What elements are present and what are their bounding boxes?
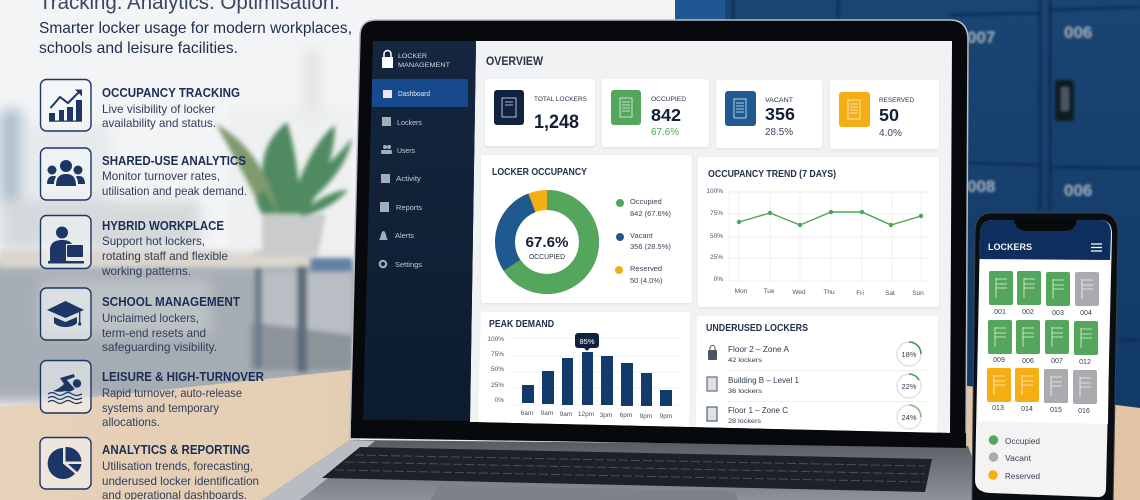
locker numbers: 004 xyxy=(1080,310,1092,317)
laptop lower bezel xyxy=(351,420,966,448)
icon: pie chart xyxy=(40,438,91,489)
locker tiles xyxy=(987,271,1099,404)
description xyxy=(102,386,242,429)
trend axis labels: 75% xyxy=(710,210,723,217)
donut chart: 67.6% xyxy=(526,234,568,251)
locker numbers: 007 xyxy=(1051,358,1063,365)
donut chart: OCCUPIED xyxy=(529,254,565,261)
menu items: Reports xyxy=(396,203,422,212)
row: building B level 1 xyxy=(707,374,921,398)
phone header: LOCKERS xyxy=(988,242,1032,252)
trend axis labels xyxy=(706,188,924,297)
trend axis labels: Sun xyxy=(912,290,924,297)
phone legend: Reserved xyxy=(1005,472,1040,481)
feature: analytics and reporting xyxy=(40,438,259,500)
brand name xyxy=(398,53,450,69)
stat card: reserved: 4.0% xyxy=(879,128,902,139)
menu items: Settings xyxy=(395,260,422,269)
row: floor 2 zone A: 18% xyxy=(901,350,917,359)
description: utilisation and peak demand. xyxy=(102,184,247,198)
heading: LEISURE & HIGH-TURNOVER xyxy=(102,370,264,384)
feature: school management xyxy=(40,288,240,354)
background: wooden desk xyxy=(0,369,1140,500)
phone screen xyxy=(975,220,1112,497)
icon: person at laptop xyxy=(40,216,91,268)
icon: rising chart xyxy=(40,80,91,131)
bar axis labels: 0% xyxy=(495,397,504,404)
bar axis labels: 12pm xyxy=(578,411,594,418)
subtitle: Smarter locker usage for modern workplaces, xyxy=(39,20,352,37)
callout: 85%: 85% xyxy=(579,337,595,346)
row: floor 1 zone C: 28 lockers xyxy=(728,418,762,425)
trend axis labels: Tue xyxy=(764,288,775,295)
bar axis labels: 9pm xyxy=(660,413,672,420)
locker numbers: 006 xyxy=(1022,358,1034,365)
icon: people xyxy=(40,148,91,200)
background: blue lockers: 008 xyxy=(967,177,995,196)
donut legend: 842 (67.6%) xyxy=(630,209,671,218)
brand name: MANAGEMENT xyxy=(398,62,450,69)
feature: occupancy tracking xyxy=(40,80,240,131)
icon: green document xyxy=(611,90,641,125)
phone body xyxy=(972,213,1118,500)
stat card: vacant: 28.5% xyxy=(765,127,793,138)
stat card: total lockers: 1,248 xyxy=(534,112,579,133)
heading: ANALYTICS & REPORTING xyxy=(102,443,250,457)
locker numbers: 009 xyxy=(993,357,1005,364)
bar axis labels: 6am xyxy=(521,410,533,417)
row: floor 1 zone C: 24% xyxy=(901,413,917,422)
feature: hybrid workplace xyxy=(40,216,228,278)
stat card: occupied: 842 xyxy=(651,105,681,125)
description: underused locker identification xyxy=(102,474,259,488)
donut legend: Vacant xyxy=(630,231,654,240)
stat card: total lockers xyxy=(485,79,595,146)
icon: swimmer xyxy=(40,360,91,413)
description: Unclaimed lockers, xyxy=(102,311,199,325)
donut chart xyxy=(505,200,589,284)
bar axis labels: 25% xyxy=(491,382,504,389)
feature: leisure and high-turnover xyxy=(40,360,264,429)
dashboard sidebar xyxy=(363,41,476,421)
overview heading: OVERVIEW xyxy=(486,56,543,68)
screen content area xyxy=(470,41,952,433)
heading: SHARED-USE ANALYTICS xyxy=(102,154,246,168)
plant xyxy=(216,122,352,216)
icon: graduation cap xyxy=(40,288,91,340)
laptop base and keyboard xyxy=(262,440,988,500)
trend line xyxy=(737,210,923,227)
phone header xyxy=(980,219,1111,260)
description: Monitor turnover rates, xyxy=(102,169,220,183)
locker numbers: 013 xyxy=(992,405,1004,412)
bar axis labels: 9am xyxy=(541,410,553,417)
stat card: occupied: 67.6% xyxy=(651,127,679,138)
panel: peak demand: PEAK DEMAND xyxy=(489,319,554,330)
icon: padlock xyxy=(382,50,393,68)
bar axis labels: 50% xyxy=(491,366,504,373)
stat card: vacant: 356 xyxy=(765,104,795,124)
description: working patterns. xyxy=(101,264,191,278)
locker numbers: 002 xyxy=(1022,309,1034,316)
trend axis labels: 25% xyxy=(710,254,723,261)
menu items xyxy=(379,117,422,269)
panel: locker occupancy: LOCKER OCCUPANCY xyxy=(492,167,587,178)
bar axis labels: 100% xyxy=(487,336,504,343)
trend axis labels: 0% xyxy=(714,276,723,283)
bar axis labels: 9pm xyxy=(640,413,652,420)
background: blue lockers: 007 xyxy=(967,28,995,47)
bars xyxy=(522,352,672,406)
row: floor 2 zone A: Floor 2 – Zone A xyxy=(728,345,790,354)
stat card: reserved: 50 xyxy=(879,105,899,125)
bar axis labels: 75% xyxy=(491,351,504,358)
description: term-end resets and xyxy=(102,326,206,340)
phone legend xyxy=(988,435,1040,481)
trend axis labels: 100% xyxy=(706,188,723,195)
stat card: vacant xyxy=(716,80,822,148)
locker numbers: 001 xyxy=(994,309,1006,316)
locker numbers: 014 xyxy=(1021,406,1033,413)
phone legend: Occupied xyxy=(1005,437,1040,446)
heading: HYBRID WORKPLACE xyxy=(102,219,224,233)
bar axis labels: 3pm xyxy=(600,412,612,419)
donut legend: 356 (28.5%) xyxy=(630,242,671,251)
stat card: occupied: OCCUPIED xyxy=(651,96,686,103)
feature: shared-use analytics xyxy=(40,148,247,200)
panel: occupancy trend xyxy=(698,157,939,307)
trend axis labels: Sat xyxy=(885,290,895,297)
locker numbers: 012 xyxy=(1079,359,1091,366)
icon: blue document xyxy=(725,91,756,126)
stat card: vacant: VACANT xyxy=(765,97,793,104)
callout: 85% xyxy=(575,333,599,351)
brand name: LOCKER xyxy=(398,53,427,60)
description: Support hot lockers, xyxy=(102,234,205,248)
locker numbers: 016 xyxy=(1078,408,1090,415)
row: floor 1 zone C xyxy=(707,405,921,429)
phone notch xyxy=(1014,219,1077,231)
laptop screen bezel xyxy=(350,20,968,445)
trend axis labels: Fri xyxy=(856,290,864,297)
donut legend: Occupied xyxy=(630,197,662,206)
bar axis labels: 9am xyxy=(560,411,572,418)
panel: underused lockers xyxy=(696,316,938,433)
description: allocations. xyxy=(102,415,160,429)
panel: occupancy trend: OCCUPANCY TREND (7 DAYS) xyxy=(708,169,836,180)
description xyxy=(102,459,259,500)
subtitle xyxy=(39,20,352,57)
stat card: reserved xyxy=(830,80,939,149)
description xyxy=(101,234,228,278)
stat card: occupied xyxy=(602,79,709,147)
icon: locker door xyxy=(494,90,524,125)
locker numbers xyxy=(992,309,1092,415)
menu items: Users xyxy=(397,146,415,155)
menu items: Lockers xyxy=(397,118,422,127)
row: building B level 1: Building B – Level 1 xyxy=(728,376,800,385)
description xyxy=(102,102,216,130)
phone locker grid xyxy=(978,260,1110,424)
description xyxy=(102,169,247,198)
menu items: Activity xyxy=(396,174,421,183)
description: Rapid turnover, auto-release xyxy=(102,386,242,400)
description: availability and status. xyxy=(102,116,216,130)
panel: underused lockers: UNDERUSED LOCKERS xyxy=(706,323,808,334)
heading: OCCUPANCY TRACKING xyxy=(102,86,240,100)
description: systems and temporary xyxy=(102,401,219,415)
bar axis labels xyxy=(487,336,672,420)
phone legend: Vacant xyxy=(1005,454,1032,463)
row: floor 2 zone A: 42 lockers xyxy=(728,357,763,364)
trend axis labels: 50% xyxy=(710,233,723,240)
row: building B level 1: 22% xyxy=(901,382,917,391)
trend axis labels: Thu xyxy=(823,289,835,296)
description: Live visibility of locker xyxy=(102,102,215,116)
row: building B level 1: 36 lockers xyxy=(728,388,763,395)
donut legend xyxy=(615,197,671,285)
subtitle: schools and leisure facilities. xyxy=(39,40,238,57)
trend axis labels: Mon xyxy=(735,288,748,295)
locker numbers: 003 xyxy=(1052,310,1064,317)
donut legend: 50 (4.0%) xyxy=(630,276,663,285)
description: safeguarding visibility. xyxy=(102,340,217,354)
description: rotating staff and flexible xyxy=(102,249,228,263)
donut legend: Reserved xyxy=(630,264,662,273)
laptop xyxy=(262,20,988,500)
panel: locker occupancy xyxy=(481,155,692,303)
trend axis labels: Wed xyxy=(792,289,806,296)
description xyxy=(102,311,217,354)
background: blue lockers: 006 xyxy=(1064,23,1092,42)
icon: orange document xyxy=(839,92,870,127)
row: floor 1 zone C: Floor 1 – Zone C xyxy=(728,406,788,415)
heading: SCHOOL MANAGEMENT xyxy=(102,295,240,309)
phone xyxy=(972,213,1118,500)
row: floor 2 zone A xyxy=(708,342,921,366)
background: blue lockers xyxy=(675,0,1140,410)
active menu item: dashboard xyxy=(372,79,468,107)
active menu item: dashboard: Dashboard xyxy=(398,89,430,98)
background: blue lockers: 006 xyxy=(1064,181,1092,200)
stat card: reserved: RESERVED xyxy=(879,97,914,104)
menu items: Alerts xyxy=(395,231,414,240)
locker numbers: 015 xyxy=(1050,407,1062,414)
description: Utilisation trends, forecasting, xyxy=(102,459,253,473)
bar axis labels: 6pm xyxy=(620,412,632,419)
panel: peak demand xyxy=(478,312,690,427)
stat card: total lockers: TOTAL LOCKERS xyxy=(534,96,587,103)
